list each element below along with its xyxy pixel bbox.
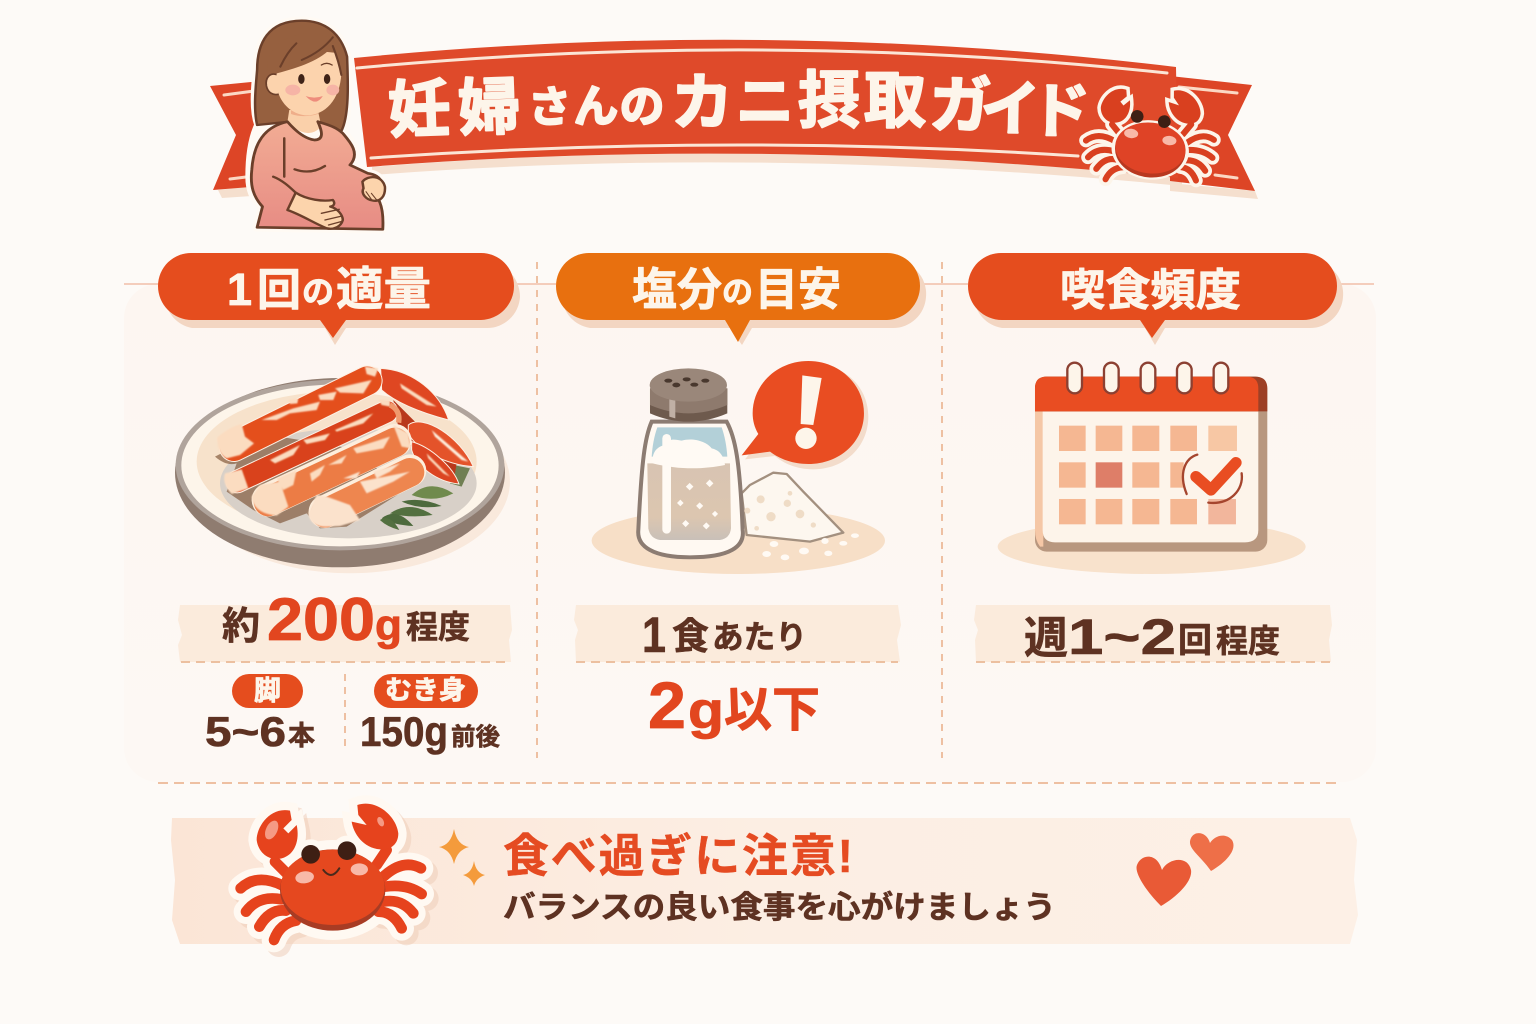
heading pill: 喫食頻度 [968, 253, 1343, 345]
warning heading: 食べ過ぎに注意! [503, 830, 853, 882]
title: ド [1030, 77, 1091, 146]
plate [175, 378, 505, 567]
amount: 2g以下: g [688, 682, 724, 740]
banner left tail [210, 81, 262, 190]
crab body [280, 849, 385, 931]
shell-on amount [205, 708, 315, 755]
shell-on amount: 5~6 [205, 708, 286, 755]
jar [638, 422, 743, 557]
shell-on amount: 本 [288, 721, 315, 751]
strip: 週1~2回程度: 回 [1178, 622, 1212, 660]
leg 2 [237, 412, 387, 482]
check mark [1183, 455, 1242, 503]
strip: 週1~2回程度: 週 [1024, 614, 1068, 663]
pill: 脚: 脚 [254, 676, 281, 706]
heading pill: 塩分の目安: 目安 [755, 264, 841, 315]
leg 1 [234, 381, 367, 447]
warning bubble [745, 365, 868, 469]
icon: crab legs on a plate [175, 367, 510, 573]
title: ガ [929, 71, 992, 142]
strip: 1食あたり: 食 [672, 616, 709, 657]
crab face [301, 845, 320, 864]
pill: むき身 [374, 674, 478, 708]
icon: hearts [1137, 833, 1234, 906]
title: カ [671, 69, 733, 138]
mouth [306, 96, 323, 102]
neck [287, 110, 321, 133]
cap [650, 388, 727, 422]
crab sticker shadow [245, 808, 426, 945]
amount text: 約 [222, 606, 260, 648]
amount strip: g [375, 601, 402, 650]
heading text: 1 [227, 264, 252, 315]
heading text: 喫食頻度 [1060, 266, 1241, 315]
pill: むき身: むき身 [385, 675, 466, 705]
date cells [1059, 426, 1237, 524]
title: 婦 [457, 73, 521, 144]
heading pill: 1回の適量: 回 [257, 266, 301, 315]
warning text: バランスの良い食事を心がけましょう [503, 890, 1056, 925]
strip: 週1~2回程度: 程度 [1216, 623, 1280, 659]
pill: 脚 [232, 674, 303, 708]
claws [393, 400, 457, 483]
divider lines [124, 262, 1374, 783]
heading pill: 塩分の目安: の [722, 275, 753, 310]
title: ん [573, 81, 619, 132]
heading pill: 1回の適量 [158, 253, 520, 345]
meat amount: 前後 [451, 723, 500, 751]
upper hand [362, 177, 385, 201]
rings [1067, 363, 1228, 393]
eyes [298, 74, 305, 84]
icon: large crab [241, 804, 426, 945]
meat amount [360, 708, 500, 755]
leg shadow [215, 433, 400, 528]
title: 妊 [387, 75, 451, 146]
amount strip: 200 [267, 586, 375, 653]
title [387, 67, 1091, 146]
meat amount: 150g [360, 708, 448, 755]
icon: header crab [1082, 81, 1219, 190]
hair [255, 21, 348, 132]
banner main ribbon [354, 40, 1178, 178]
amount: 2g以下 [648, 668, 820, 742]
title: さ [528, 84, 572, 132]
heading text: 塩分 [632, 264, 722, 315]
leg 4 [325, 471, 410, 512]
ear [266, 74, 279, 95]
title: ニ [736, 70, 794, 135]
strip: 1食あたり [574, 605, 901, 663]
leg 3 [268, 441, 395, 500]
title banner [210, 40, 1258, 199]
icon: calendar [998, 363, 1306, 574]
strip: 週1~2回程度 [974, 605, 1332, 665]
strip: 週1~2回程度: 1~2 [1068, 609, 1176, 665]
leaves [412, 486, 453, 499]
dress [251, 122, 383, 229]
salt pile [742, 473, 843, 542]
icon: pregnant woman [250, 21, 385, 229]
amount: 2g以下: 以下 [724, 684, 820, 737]
strip: 1食あたり: あたり [712, 619, 807, 655]
heading pill: 塩分の目安 [556, 253, 926, 345]
title: 取 [864, 67, 926, 136]
icon: salt shaker [592, 361, 885, 574]
amount strip: 程度 [406, 609, 470, 645]
panel: warning band [171, 818, 1358, 944]
lower hand [287, 193, 343, 229]
amount: 2g以下: 2 [648, 668, 686, 742]
face [276, 50, 341, 115]
banner right tail [1170, 76, 1255, 191]
bangs [268, 34, 345, 73]
strip: 1食あたり: 1 [642, 607, 666, 663]
amount strip [178, 586, 512, 662]
title: 摂 [798, 67, 860, 136]
title: イ [980, 75, 1041, 144]
heading pill: 1回の適量: 適量 [336, 263, 431, 315]
panel: content background [124, 284, 1376, 782]
icon: sparkles [439, 829, 485, 886]
heading pill: 1回の適量: の [302, 274, 334, 310]
title: の [619, 81, 665, 132]
